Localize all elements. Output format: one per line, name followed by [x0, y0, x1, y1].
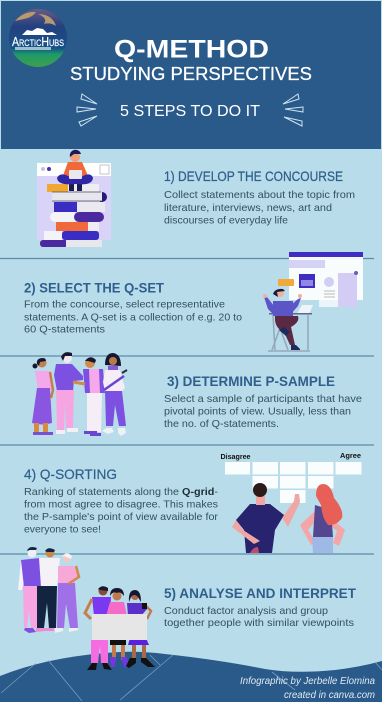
- icon: left burst: [77, 94, 97, 126]
- text block: discourses of everyday life: [164, 214, 288, 226]
- text block: [164, 189, 355, 226]
- text block: statements. A Q-set is a collection of e.g. 20 to: [24, 312, 242, 324]
- text block: Collect statements about the topic from: [164, 189, 355, 201]
- chart: Q-grid: [220, 453, 362, 503]
- text block: Ranking of statements along the Q-grid-: [24, 486, 219, 498]
- illustration: person at desk: [263, 252, 363, 352]
- illustration: group with banner: [85, 586, 155, 670]
- heading: 5) ANALYSE AND INTERPRET: [164, 585, 356, 601]
- text block: From the concourse, select representative: [24, 299, 225, 311]
- illustration: three standing people: [18, 547, 79, 633]
- panel: step 4: [24, 453, 362, 553]
- text block: [24, 299, 242, 336]
- person 3: [73, 357, 105, 436]
- panel: step 3: [32, 352, 362, 436]
- panel: step 1: [37, 150, 355, 247]
- panel: header: [1, 1, 381, 149]
- credit: created in canva.com: [284, 690, 375, 701]
- chart: Q-grid: Disagree: [220, 454, 251, 461]
- person 1: [32, 358, 53, 435]
- panel: step 2: [24, 252, 363, 352]
- text block: literature, interviews, news, art and: [164, 202, 332, 214]
- text block: 60 Q-statements: [24, 324, 105, 336]
- tagline: 5 STEPS TO DO IT: [120, 103, 261, 120]
- wave footer: [0, 652, 382, 702]
- text block: the P-sample's point of view available for: [24, 511, 219, 523]
- text block: [164, 605, 354, 629]
- title: Q-METHOD: [114, 36, 269, 64]
- credit: [240, 676, 375, 701]
- text block: everyone to see!: [24, 524, 101, 536]
- heading: 4) Q-SORTING: [24, 466, 117, 482]
- logo: ArcticHubs: ARCTICHUBS: [12, 34, 64, 49]
- icon: right burst: [283, 94, 303, 126]
- illustration: four people talking: [32, 352, 127, 436]
- credit: Infographic by Jerbelle Elomina: [240, 676, 375, 687]
- chart: Q-grid: Agree: [340, 453, 361, 460]
- text block: together people with similar viewpoints: [164, 617, 354, 629]
- text block: [164, 393, 362, 430]
- heading: 3) DETERMINE P-SAMPLE: [167, 373, 335, 389]
- logo: ArcticHubs: [9, 9, 67, 67]
- text block: from most agree to disagree. This makes: [24, 498, 218, 510]
- text block: Select a sample of participants that have: [164, 393, 362, 405]
- text block: pivotal points of view. Usually, less than: [164, 406, 351, 418]
- panel: step 5: [18, 547, 356, 670]
- text block: the no. of Q-statements.: [164, 418, 279, 430]
- heading: 1) DEVELOP THE CONCOURSE: [164, 168, 343, 184]
- heading: 2) SELECT THE Q-SET: [24, 280, 164, 296]
- text block: Conduct factor analysis and group: [164, 605, 328, 617]
- subtitle: STUDYING PERSPECTIVES: [70, 64, 312, 84]
- text block: [24, 486, 219, 536]
- person 4: [102, 353, 127, 436]
- illustration: two people at grid: [232, 483, 345, 553]
- person 2: [54, 352, 83, 434]
- illustration: person on books: [37, 150, 111, 247]
